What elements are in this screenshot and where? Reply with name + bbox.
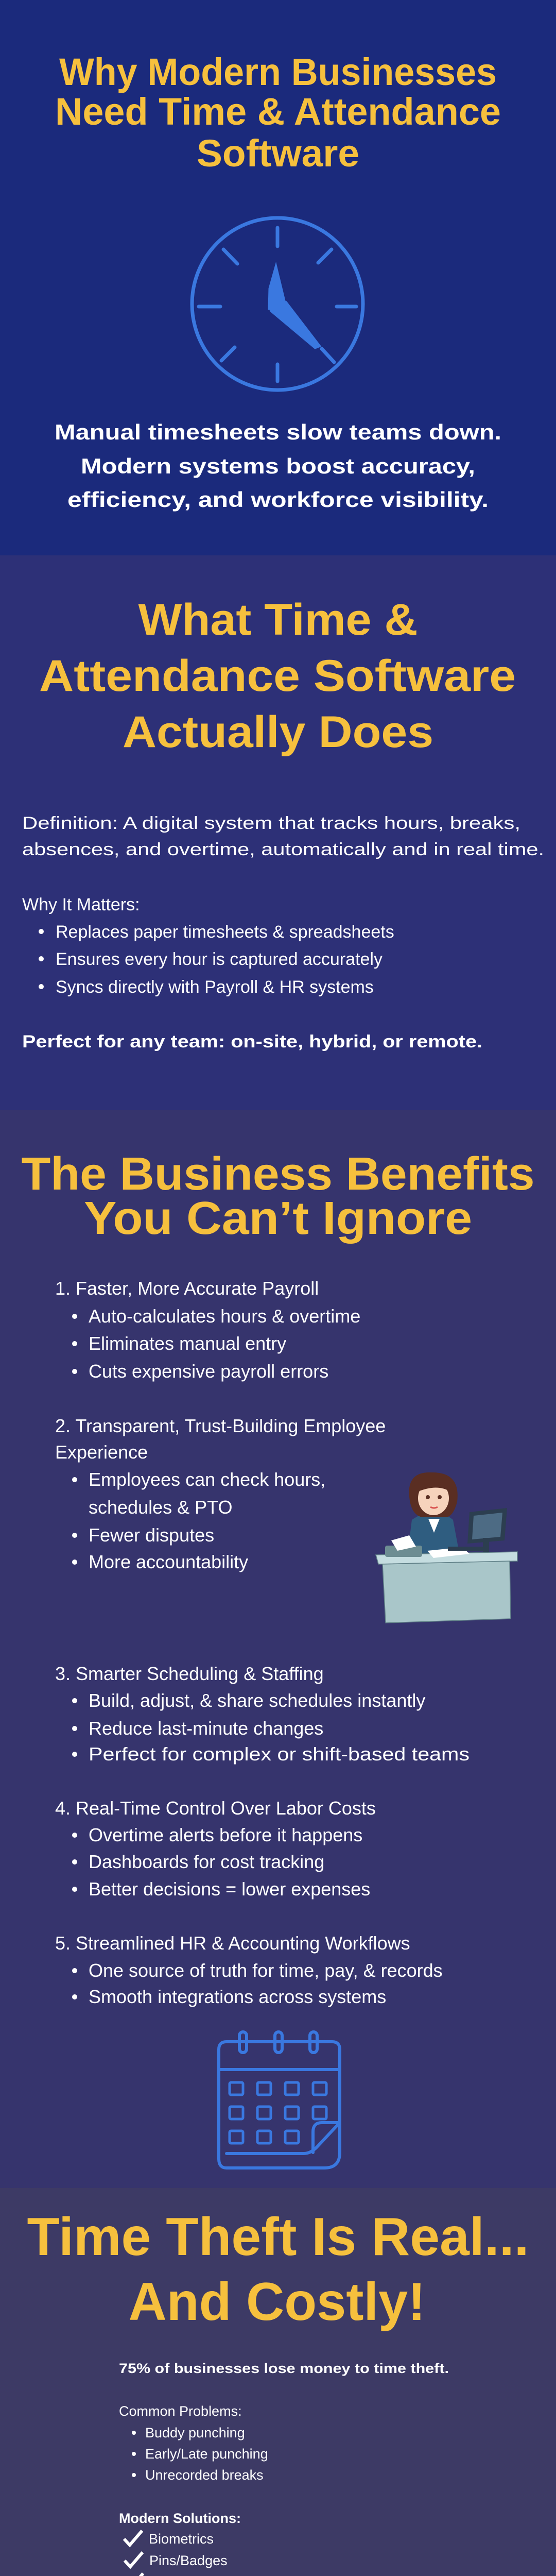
title: Why Modern Businesses: Why Modern Businesses (59, 50, 497, 93)
text block: definition: Syncs directly with Payroll & HR systems (56, 977, 374, 997)
subtitle (55, 420, 501, 512)
text block: definition: Why It Matters: (22, 895, 140, 914)
text block: stats: Buddy punching (145, 2425, 245, 2441)
subtitle: Modern systems boost accuracy, (81, 454, 475, 478)
heading: Actually Does (123, 707, 433, 757)
heading: You Can’t Ignore (84, 1193, 472, 1244)
icon: woman at desk (376, 1472, 517, 1623)
heading: Time Theft Is Real... (27, 2207, 529, 2267)
list: benefits: Cuts expensive payroll errors (89, 1361, 328, 1382)
list: benefits: 1. Faster, More Accurate Payroll (55, 1278, 319, 1299)
text block: stats: Biometrics (149, 2531, 214, 2547)
panel: what it does (22, 595, 544, 1052)
heading (27, 2207, 529, 2332)
panel: intro (55, 50, 501, 512)
title: Why Modern Businesses (55, 50, 501, 175)
list: benefits: Perfect for complex or shift-based teams (89, 1743, 470, 1765)
list: benefits: schedules & PTO (89, 1497, 232, 1518)
text block: definition: Perfect for any team: on-site, hybrid, or remote. (22, 1032, 482, 1052)
list: benefits: Eliminates manual entry (89, 1333, 286, 1354)
list: benefits: Dashboards for cost tracking (89, 1851, 324, 1872)
heading: The Business Benefits (22, 1148, 534, 1200)
text block: stats: Modern Solutions: (119, 2511, 241, 2526)
list: benefits: 4. Real-Time Control Over Labor Costs (55, 1798, 376, 1819)
title: Why Modern Businesses: Need Time & Attendance (55, 90, 501, 133)
title: Why Modern Businesses: Software (197, 132, 359, 175)
list: benefits (55, 1278, 470, 2007)
list: benefits: Reduce last-minute changes (89, 1718, 323, 1739)
heading: What Time & (138, 595, 418, 645)
list: benefits: 3. Smarter Scheduling & Staffing (55, 1663, 324, 1684)
list: benefits: One source of truth for time, pay, & records (89, 1960, 443, 1981)
list: benefits: Overtime alerts before it happens (89, 1824, 362, 1845)
list: benefits: Better decisions = lower expenses (89, 1878, 370, 1900)
text block: stats: Common Problems: (119, 2403, 242, 2419)
text block: definition: Ensures every hour is captured accurately (56, 950, 383, 969)
subtitle: Manual timesheets slow teams down. (55, 420, 501, 444)
list: benefits: Experience (55, 1442, 148, 1463)
heading (39, 595, 516, 757)
panel: time theft (27, 2207, 529, 2576)
list: benefits: 2. Transparent, Trust-Building Employee (55, 1415, 386, 1436)
list: benefits: Auto-calculates hours & overtime (89, 1306, 360, 1327)
icon: calendar (219, 2032, 340, 2168)
text block: stats (119, 2361, 449, 2576)
list: benefits: Employees can check hours, (89, 1469, 325, 1490)
text block: stats: Unrecorded breaks (145, 2467, 264, 2483)
subtitle: efficiency, and workforce visibility. (67, 487, 489, 512)
text block: definition: Definition: A digital system that tracks hours, breaks, (22, 814, 520, 833)
list: benefits: 5. Streamlined HR & Accounting Workflows (55, 1933, 410, 1954)
text block: stats: 75% of businesses lose money to time theft. (119, 2361, 449, 2376)
text block: definition: absences, and overtime, automatically and in real time. (22, 840, 544, 859)
list: benefits: Smooth integrations across systems (89, 1986, 386, 2007)
panel: benefits (22, 1148, 534, 2168)
heading: Attendance Software (39, 651, 516, 701)
text block: definition (22, 814, 544, 1052)
list: benefits: Build, adjust, & share schedules instantly (89, 1690, 425, 1711)
heading (22, 1148, 534, 1244)
icon: clock (192, 218, 363, 390)
text block: stats: Early/Late punching (145, 2446, 268, 2462)
text block: definition: Replaces paper timesheets & spreadsheets (56, 922, 394, 942)
list: benefits: More accountability (89, 1551, 248, 1572)
text block: stats: Pins/Badges (149, 2553, 228, 2568)
heading: And Costly! (129, 2272, 425, 2332)
list: benefits: Fewer disputes (89, 1524, 214, 1546)
